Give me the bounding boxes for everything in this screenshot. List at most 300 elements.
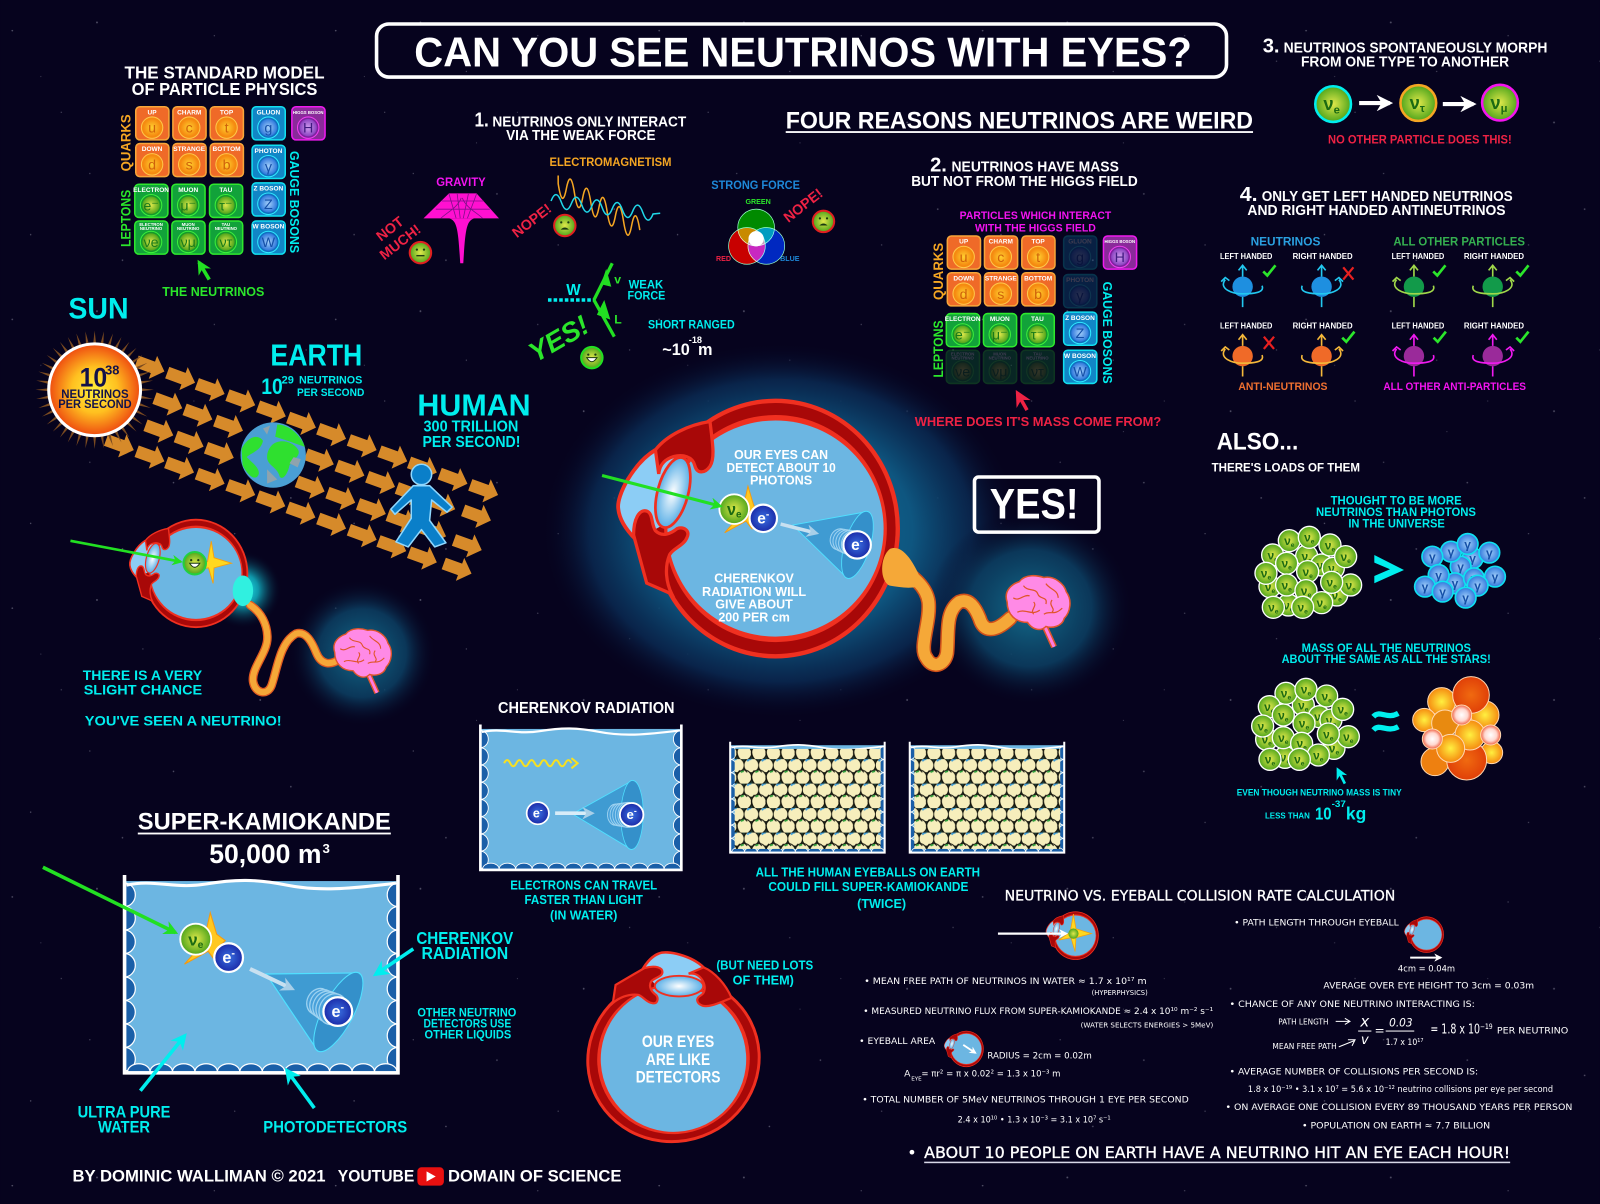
- neutrino cluster and stars: ν: [1323, 727, 1330, 741]
- higgs label: WITH THE HIGGS FIELD: [975, 222, 1096, 234]
- panel: reason 2: [911, 154, 1161, 429]
- particle grid: H: [303, 121, 313, 137]
- right column calculations: v: [1361, 1033, 1369, 1048]
- higgs grid: νe: [955, 364, 970, 380]
- panel: also: [1212, 428, 1505, 823]
- cherenkov heading: CHERENKOV RADIATION: [498, 700, 674, 717]
- right column calculations: 0.03: [1389, 1016, 1413, 1029]
- slight chance text: THERE IS A VERY: [83, 668, 203, 684]
- neutrino and photon clusters: e: [1275, 609, 1279, 616]
- neutrino cluster and stars: e: [1335, 750, 1339, 757]
- neutrino and photon clusters: ν: [1326, 576, 1333, 590]
- reason 4 heading: ONLY GET LEFT HANDED NEUTRINOS: [1262, 189, 1513, 205]
- neutrino and photon clusters: γ: [1462, 591, 1469, 605]
- higgs grid: NEUTRINO: [952, 355, 974, 360]
- panel: cherenkov radiation: [480, 700, 681, 922]
- small eye: [130, 519, 248, 628]
- weak force diagram: [548, 263, 665, 337]
- panel: reason 1: [374, 110, 834, 368]
- footer credit: DOMAIN OF SCIENCE: [448, 1168, 622, 1186]
- handedness labels: RIGHT HANDED: [1293, 252, 1353, 261]
- neutrino and photon clusters: ν: [1283, 598, 1290, 612]
- higgs grid: NEUTRINO: [1026, 355, 1049, 360]
- particle grid: PHOTON: [255, 148, 283, 155]
- electron and cone: -: [540, 805, 543, 815]
- neutrino and photon clusters: e: [1291, 542, 1295, 549]
- neutrino cluster and stars: ν: [1281, 687, 1287, 701]
- footer credit: [72, 1167, 622, 1186]
- super-k cone: [246, 935, 372, 1058]
- not much with face: MUCH!: [377, 222, 424, 264]
- neutrino and photon clusters: γ: [1471, 572, 1478, 586]
- also heading: THERE'S LOADS OF THEM: [1212, 462, 1360, 475]
- no other particle: NO OTHER PARTICLE DOES THIS!: [1328, 132, 1512, 146]
- panel: super-kamiokande: [43, 809, 516, 1137]
- eyeballs caption: COULD FILL SUPER-KAMIOKANDE: [768, 879, 968, 894]
- standard model heading: THE STANDARD MODEL: [125, 63, 325, 83]
- calculation title: NEUTRINO VS. EYEBALL COLLISION RATE CALCULATION: [1005, 889, 1395, 905]
- mass text: [1282, 642, 1491, 666]
- particle grid: UP: [148, 109, 157, 116]
- oscillation sequence: μ: [1501, 103, 1508, 115]
- earth label: 10: [261, 374, 283, 399]
- other liquids note: OTHER LIQUIDS: [425, 1028, 511, 1042]
- nope with face: [510, 201, 576, 242]
- higgs grid: HIGGS BOSON: [1104, 239, 1135, 244]
- neutrino cluster and stars: ν: [1337, 703, 1344, 717]
- neutrino cluster and stars: ν: [1329, 742, 1335, 756]
- neutrino and photon clusters: ν: [1301, 549, 1308, 563]
- cherenkov caption: [510, 878, 657, 922]
- neutrino cluster and stars: e: [1285, 739, 1289, 746]
- super-k collision: e: [198, 940, 204, 951]
- super-k tank: [125, 875, 398, 1073]
- sun disc: [35, 330, 154, 449]
- earth label: EARTH: [270, 338, 362, 372]
- higgs side labels: QUARKS: [931, 243, 947, 300]
- neutrino and photon clusters: ν: [1316, 596, 1323, 610]
- conclusion: ABOUT 10 PEOPLE ON EARTH HAVE A NEUTRINO HIT AN EYE EACH HOUR!: [924, 1143, 1510, 1162]
- left column calculations: • EYEBALL AREA: [859, 1036, 936, 1047]
- particle grid: TOP: [220, 109, 234, 116]
- eyeball tank 1: [730, 742, 885, 853]
- neutrino and photon clusters: γ: [1448, 545, 1455, 559]
- neutrino and photon clusters: γ: [1435, 568, 1442, 582]
- neutrino cluster and stars: e: [1264, 727, 1268, 734]
- ultra pure water label: [78, 1036, 185, 1137]
- super-k heading: SUPER-KAMIOKANDE: [138, 809, 391, 836]
- panel: reason 3: [1263, 36, 1547, 146]
- left column calculations: • MEASURED NEUTRINO FLUX FROM SUPER-KAMIOKANDE ≈ 2.4 x 10¹⁰ m⁻² s⁻¹: [863, 1006, 1214, 1017]
- central eye glow: [541, 342, 1020, 719]
- small optic nerve: [233, 575, 340, 692]
- neutrino and photon clusters: γ: [1439, 585, 1446, 599]
- conclusion: •: [907, 1143, 917, 1162]
- left column calculations: • MEAN FREE PATH OF NEUTRINOS IN WATER ≈ 1.7 x 10¹⁷ m: [864, 976, 1147, 987]
- higgs side labels: [931, 243, 1115, 384]
- column titles: ALL OTHER PARTICLES: [1393, 234, 1525, 248]
- panel: central eye: [602, 399, 1070, 665]
- cherenkov caption: ELECTRONS CAN TRAVEL: [510, 878, 657, 893]
- neutrino and photon clusters: ν: [1297, 601, 1304, 615]
- nope with face: NOPE!: [510, 201, 555, 242]
- neutrino cluster and stars: e: [1268, 741, 1272, 748]
- higgs grid: NEUTRINO: [989, 355, 1012, 360]
- particle grid: W: [262, 235, 276, 251]
- neutrino cluster and stars: e: [1344, 711, 1348, 718]
- right column calculations: • PATH LENGTH THROUGH EYEBALL: [1234, 917, 1400, 928]
- neutrino collision in eye: e: [757, 510, 766, 527]
- handedness labels: LEFT HANDED: [1392, 321, 1444, 330]
- neutrino cluster and stars: e: [1286, 759, 1290, 766]
- particle grid: ντ: [219, 235, 233, 251]
- neutrino and photon clusters: e: [1267, 575, 1271, 582]
- earth label: [261, 338, 364, 399]
- strong force: [711, 178, 800, 264]
- panel: human: [391, 388, 531, 547]
- higgs grid: b: [1034, 287, 1042, 303]
- super-k collision: ν: [188, 930, 198, 949]
- cherenkov tank: [480, 724, 681, 870]
- reason 1 heading: 1.: [475, 110, 489, 132]
- neutrino and photon clusters: e: [1271, 588, 1275, 595]
- short ranged: ~10: [662, 341, 690, 359]
- neutrino collision in eye: ν: [727, 501, 736, 519]
- strong force: STRONG FORCE: [711, 178, 800, 192]
- gravity: [423, 175, 499, 263]
- neutrino cluster and stars: [1252, 677, 1503, 780]
- more neutrinos text: IN THE UNIVERSE: [1348, 517, 1445, 530]
- particle grid: NEUTRINO: [215, 226, 238, 231]
- reason 4 heading: AND RIGHT HANDED ANTINEUTRINOS: [1247, 203, 1506, 219]
- big eye text top: DETECT ABOUT 10: [727, 460, 836, 475]
- super-k heading: 50,000 m: [209, 839, 321, 869]
- higgs side labels: GAUGE BOSONS: [1100, 282, 1115, 384]
- oscillation sequence: τ: [1420, 103, 1425, 115]
- electron and cone: e: [533, 806, 540, 820]
- big brain: [1006, 576, 1070, 647]
- left column calculations: (WATER SELECTS ENERGIES > 5MeV): [1081, 1021, 1214, 1029]
- panel: eyeball tanks: [730, 742, 1064, 911]
- weak force diagram: v: [614, 273, 621, 287]
- detector eye text: [636, 1033, 721, 1087]
- light wave: [504, 758, 578, 768]
- sun text: 38: [105, 362, 119, 377]
- super-k heading: [138, 809, 391, 869]
- particle grid: νμ: [181, 235, 196, 251]
- big eye text bottom: GIVE ABOUT: [715, 597, 793, 612]
- electromagnetism: ELECTROMAGNETISM: [550, 155, 671, 169]
- slight chance text: SLIGHT CHANCE: [84, 682, 202, 698]
- particle grid: τ⁻: [219, 198, 232, 214]
- reason 3 heading: 3.: [1263, 36, 1280, 58]
- neutrino cluster and stars: ν: [1294, 753, 1301, 767]
- handedness labels: RIGHT HANDED: [1293, 321, 1353, 330]
- higgs grid: ELECTRON: [951, 351, 974, 356]
- reason 4 heading: [1240, 184, 1513, 219]
- super-k collision: -: [231, 948, 235, 960]
- slight chance text: YOU'VE SEEN A NEUTRINO!: [85, 714, 282, 730]
- neutrino and photon clusters: e: [1274, 556, 1278, 563]
- weak force diagram: W: [566, 282, 581, 299]
- reason 3 heading: [1263, 36, 1547, 71]
- neutrino and photon clusters: γ: [1457, 560, 1464, 574]
- earth label: PER SECOND: [297, 387, 364, 399]
- left column calculations: = πr² = π x 0.02² = 1.3 x 10⁻³ m: [921, 1068, 1061, 1079]
- reason 3 heading: NEUTRINOS SPONTANEOUSLY MORPH: [1284, 41, 1547, 57]
- standard model heading: OF PARTICLE PHYSICS: [132, 79, 317, 99]
- neutrino and photon clusters: [1255, 526, 1505, 618]
- super-k collision: [43, 867, 243, 972]
- short ranged: m: [698, 341, 712, 359]
- right column calculations: = 1.8 x 10⁻¹⁹: [1430, 1022, 1493, 1037]
- neutrino cluster and stars: e: [1287, 695, 1291, 702]
- more neutrinos text: [1316, 495, 1476, 530]
- need lots note: OF THEM): [733, 973, 794, 988]
- right column calculations: MEAN FREE PATH: [1272, 1042, 1337, 1051]
- particle grid: Z BOSON: [254, 185, 284, 192]
- human label: HUMAN: [417, 388, 531, 422]
- big eye text top: [727, 447, 836, 488]
- higgs grid: W BOSON: [1064, 353, 1096, 360]
- oscillation sequence: ν: [1410, 92, 1420, 113]
- particle grid: MUON: [182, 222, 195, 227]
- title: CAN YOU SEE NEUTRINOS WITH EYES?: [414, 28, 1192, 75]
- higgs grid: MUON: [993, 351, 1006, 356]
- reason 1 heading: NEUTRINOS ONLY INTERACT: [492, 115, 686, 131]
- neutrino cluster and stars: ν: [1278, 708, 1285, 722]
- neutrino cluster and stars: ν: [1298, 698, 1305, 712]
- neutrino and photon clusters: e: [1347, 558, 1351, 565]
- big eye: [618, 399, 900, 658]
- not much with face: NOT: [374, 214, 407, 245]
- sun text: PER SECOND: [58, 397, 132, 411]
- neutrino flux arrows: [102, 350, 502, 585]
- higgs grid: UP: [959, 239, 969, 246]
- particle grid: TAU: [222, 222, 230, 227]
- tiny mass note: -37: [1332, 799, 1346, 809]
- neutrino and photon clusters: γ: [1429, 550, 1436, 564]
- higgs grid: τ⁻: [1031, 328, 1044, 344]
- neutrino cluster and stars: e: [1285, 716, 1289, 723]
- panel: earth: [241, 338, 364, 488]
- particle grid: t: [225, 121, 229, 137]
- reason 3 heading: FROM ONE TYPE TO ANOTHER: [1301, 55, 1509, 71]
- human figure: [391, 464, 452, 547]
- particle grid: ELECTRON: [139, 222, 163, 227]
- neutrino cluster and stars: e: [1305, 725, 1309, 732]
- cherenkov cone in eye: -: [860, 536, 863, 547]
- heading: four reasons: FOUR REASONS NEUTRINOS ARE WEIRD: [786, 108, 1253, 135]
- neutrino and photon clusters: γ: [1464, 537, 1471, 551]
- big eye text bottom: CHERENKOV: [714, 571, 794, 586]
- also heading: ALSO...: [1217, 428, 1298, 455]
- particle grid: NEUTRINO: [140, 226, 163, 231]
- more neutrinos text: THOUGHT TO BE MORE: [1331, 495, 1462, 508]
- neutrino and photon clusters: ν: [1328, 562, 1335, 576]
- neutrino cluster and stars: e: [1301, 761, 1305, 768]
- higgs grid: TOP: [1032, 239, 1045, 246]
- detector eye text: OUR EYES: [642, 1033, 714, 1051]
- spin icons: [1221, 265, 1529, 377]
- higgs grid: GLUON: [1068, 239, 1092, 246]
- not much with face: [374, 214, 431, 264]
- reason 2 heading: BUT NOT FROM THE HIGGS FIELD: [911, 174, 1138, 190]
- handedness labels: LEFT HANDED: [1392, 252, 1444, 261]
- cherenkov label: RADIATION: [421, 943, 508, 963]
- particle grid: DOWN: [142, 146, 163, 153]
- neutrino and photon clusters: e: [1338, 596, 1342, 603]
- right column calculations: PER NEUTRINO: [1497, 1025, 1568, 1036]
- super-k cone: e: [331, 1003, 340, 1021]
- detector eye: [562, 934, 780, 1163]
- neutrino cluster and stars: ν: [1314, 710, 1321, 724]
- gravity: GRAVITY: [436, 175, 486, 189]
- panel: collision rate calculation: [859, 889, 1572, 1163]
- neutrino and photon clusters: e: [1309, 573, 1313, 580]
- neutrino and photon clusters: ν: [1325, 538, 1331, 552]
- higgs grid: ELECTRON: [945, 316, 981, 323]
- human label: PER SECOND!: [422, 434, 520, 451]
- cherenkov label: [376, 928, 514, 974]
- particle grid: μ⁻: [180, 198, 196, 214]
- particle grid: γ: [265, 159, 273, 175]
- neutrino and photon clusters: e: [1323, 566, 1327, 573]
- neutrino cluster and stars: ν: [1280, 751, 1286, 765]
- particle grid: ELECTRON: [133, 187, 169, 194]
- left column calculations: • TOTAL NUMBER OF 5MeV NEUTRINOS THROUGH 1 EYE PER SECOND: [862, 1094, 1189, 1105]
- earth label: NEUTRINOS: [299, 375, 363, 387]
- neutrino and photon clusters: e: [1323, 604, 1327, 611]
- higgs grid: γ: [1076, 289, 1084, 305]
- neutrino and photon clusters: e: [1333, 584, 1337, 591]
- callout: yes: [974, 477, 1099, 532]
- neutrino cluster and stars: e: [1328, 697, 1332, 704]
- higgs grid: νμ: [992, 364, 1007, 380]
- neutrino cluster and stars: e: [1321, 718, 1325, 725]
- neutrinos arrow and label: THE NEUTRINOS: [162, 284, 264, 299]
- right column calculations: 1.7 x 10¹⁷: [1386, 1037, 1424, 1048]
- neutrino and photon clusters: γ: [1452, 577, 1459, 591]
- sun text: NEUTRINOS: [61, 387, 129, 401]
- small brain glow: [289, 580, 436, 726]
- slight chance text: [83, 668, 282, 730]
- ultra pure water label: ULTRA PURE: [78, 1103, 171, 1121]
- neutrino and photon clusters: e: [1288, 586, 1292, 593]
- neutrino cluster and stars: ν: [1301, 683, 1307, 697]
- handedness labels: [1220, 252, 1524, 330]
- higgs grid: ντ: [1031, 364, 1044, 380]
- higgs grid: Z BOSON: [1065, 315, 1095, 322]
- neutrino and photon clusters: e: [1311, 539, 1315, 546]
- particle grid: BOTTOM: [213, 146, 241, 153]
- neutrino and photon clusters: e: [1352, 586, 1356, 593]
- neutrino cluster and stars: ν: [1326, 713, 1332, 727]
- detector eye text: DETECTORS: [636, 1069, 721, 1087]
- right column calculations: • AVERAGE NUMBER OF COLLISIONS PER SECOND IS:: [1230, 1066, 1478, 1077]
- human label: 300 TRILLION: [423, 419, 518, 436]
- neutrino cluster and stars: ν: [1343, 730, 1350, 744]
- reason 2 heading: 2.: [930, 154, 947, 176]
- neutrino cluster and stars: e: [1320, 756, 1324, 763]
- eyeballs caption: [756, 864, 980, 911]
- neutrino collision in eye: [602, 475, 777, 533]
- left column calculations: [859, 976, 1214, 1125]
- higgs grid: s: [997, 287, 1004, 303]
- particle grid: g: [264, 121, 272, 137]
- tiny mass note: LESS THAN: [1265, 810, 1310, 820]
- need lots note: [716, 957, 813, 988]
- higgs grid: e⁻: [955, 328, 970, 344]
- electromagnetism: [550, 155, 671, 235]
- neutrino cluster and stars: e: [1350, 738, 1354, 745]
- small eye glow: [204, 551, 282, 629]
- earth label: 29: [282, 375, 294, 387]
- higgs side labels: LEPTONS: [931, 320, 947, 378]
- particle grid: e⁻: [143, 198, 159, 214]
- column titles: [1238, 234, 1526, 393]
- panel: reason 4: [1220, 184, 1529, 393]
- neutrino cluster and stars: ν: [1261, 733, 1268, 747]
- particle grid: MUON: [178, 187, 198, 194]
- detector eye text: ARE LIKE: [646, 1051, 710, 1069]
- neutrino cluster and stars: ν: [1257, 719, 1264, 733]
- left column calculations: EYE: [911, 1077, 922, 1083]
- side labels: [119, 114, 302, 253]
- reason 4 heading: 4.: [1240, 184, 1258, 206]
- right column calculations: • CHANCE OF ANY ONE NEUTRINO INTERACTING IS:: [1230, 999, 1475, 1010]
- handedness labels: RIGHT HANDED: [1464, 252, 1524, 261]
- particle grid: Z: [264, 197, 273, 213]
- neutrino and photon clusters: ν: [1316, 558, 1323, 572]
- higgs grid: MUON: [990, 316, 1010, 323]
- strong force: BLUE: [780, 255, 800, 263]
- footer credit: BY DOMINIC WALLIMAN © 2021: [72, 1168, 326, 1186]
- other liquids note: OTHER NEUTRINO: [417, 1005, 516, 1019]
- particle grid: GLUON: [257, 109, 280, 116]
- side labels: LEPTONS: [119, 190, 135, 247]
- neutrino and photon clusters: ν: [1301, 584, 1307, 598]
- tiny mass note: 10: [1315, 803, 1332, 823]
- short ranged: SHORT RANGED: [648, 318, 735, 332]
- right column calculations: AVERAGE OVER EYE HEIGHT TO 3cm = 0.03m: [1323, 981, 1534, 992]
- neutrino and photon clusters: ν: [1267, 548, 1274, 562]
- strong force: RED: [716, 255, 731, 263]
- nope with face 2: NOPE!: [781, 186, 826, 226]
- weak force diagram: WEAK: [629, 277, 663, 291]
- neutrino and photon clusters: γ: [1474, 579, 1481, 593]
- neutrino cluster and stars: e: [1303, 745, 1307, 752]
- neutrino and photon clusters: e: [1288, 565, 1292, 572]
- mass question: WHERE DOES IT'S MASS COME FROM?: [915, 414, 1161, 429]
- higgs grid: u: [960, 250, 968, 266]
- neutrino cluster and stars: ν: [1296, 737, 1303, 751]
- photodetectors label: [263, 1070, 407, 1137]
- neutrino cluster and stars: e: [1332, 721, 1336, 728]
- reason 2 heading: NEUTRINOS HAVE MASS: [952, 159, 1119, 175]
- column titles: ANTI-NEUTRINOS: [1238, 381, 1328, 393]
- big eye text top: OUR EYES CAN: [734, 447, 828, 462]
- brain glow: [929, 511, 1133, 705]
- neutrino cluster and stars: e: [1271, 708, 1275, 715]
- side labels: GAUGE BOSONS: [287, 151, 302, 253]
- yes with face: YES!: [523, 309, 594, 368]
- tiny mass note: [1237, 769, 1402, 823]
- higgs grid: PHOTON: [1066, 277, 1094, 284]
- higgs grid: t: [1036, 250, 1040, 266]
- mass text: MASS OF ALL THE NEUTRINOS: [1302, 642, 1471, 655]
- short ranged: -18: [689, 335, 702, 345]
